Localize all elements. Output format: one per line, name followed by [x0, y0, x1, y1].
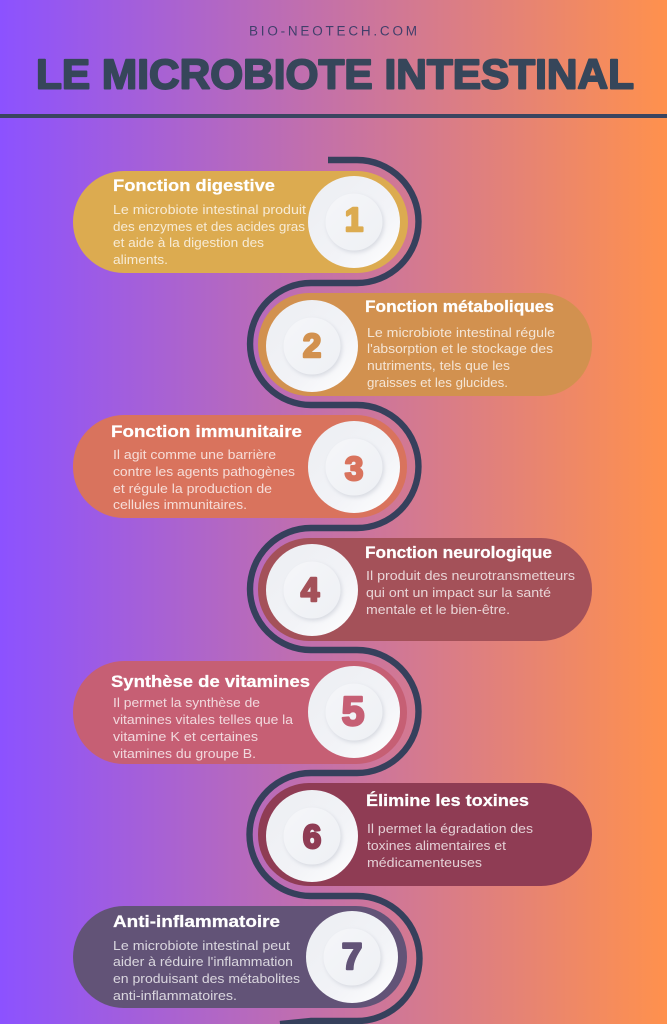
body 2: l'absorption et le stockage des [367, 342, 553, 356]
pill 1 [73, 171, 408, 273]
body 5 [113, 696, 293, 761]
body 2 [367, 326, 555, 390]
step 6 [258, 783, 592, 886]
heading 4: Fonction neurologique [365, 543, 552, 562]
body 7: anti-inflammatoires. [113, 989, 237, 1003]
winding timeline path [250, 160, 420, 1024]
number 7: 7 [342, 936, 362, 977]
disc 2 [266, 300, 358, 392]
body 4: Il produit des neurotransmetteurs [366, 569, 575, 583]
body 3: Il agit comme une barrière [113, 448, 276, 462]
pill 3 [73, 415, 407, 518]
header rule [0, 114, 667, 118]
step 2 [258, 293, 592, 396]
number 3: 3 [345, 450, 363, 487]
number 1: 1 [345, 201, 363, 238]
number 4: 4 [301, 571, 320, 608]
pill 7 [73, 906, 407, 1008]
heading 2: Fonction métaboliques [365, 297, 554, 316]
body 6 [367, 822, 533, 870]
pill 6 [258, 783, 592, 886]
body 7: aider à réduire l'inflammation [113, 955, 293, 969]
body 1: aliments. [113, 253, 168, 267]
body 3: et régule la production de [113, 482, 272, 496]
body 5: vitamines vitales telles que la [113, 713, 293, 727]
body 4: mentale et le bien-être. [366, 603, 510, 617]
number 2: 2 [303, 327, 321, 364]
heading 5: Synthèse de vitamines [111, 672, 310, 691]
heading 3: Fonction immunitaire [111, 422, 302, 441]
body 1: des enzymes et des acides gras [113, 220, 305, 234]
body 6: Il permet la égradation des [367, 822, 533, 836]
body 1: Le microbiote intestinal produit [113, 203, 307, 217]
body 6: médicamenteuses [367, 856, 482, 870]
body 7: Le microbiote intestinal peut [113, 939, 291, 953]
disc 3 [308, 421, 400, 513]
title: LE MICROBIOTE INTESTINAL [36, 50, 634, 98]
disc 4 [266, 544, 358, 636]
body 7: en produisant des métabolites [113, 972, 300, 986]
disc 7 [306, 911, 398, 1003]
step 4 [258, 538, 592, 641]
website label: BIO-NEOTECH.COM [249, 24, 417, 38]
body 6: toxines alimentaires et [367, 839, 507, 853]
body 2: Le microbiote intestinal régule [367, 326, 555, 340]
pill 4 [258, 538, 592, 641]
body 5: vitamines du groupe B. [113, 747, 256, 761]
disc 1 [308, 176, 400, 268]
body 3 [113, 448, 295, 512]
body 2: graisses et les glucides. [367, 376, 508, 390]
step 1 [73, 171, 408, 273]
disc 5 [308, 666, 400, 758]
body 7 [113, 939, 300, 1003]
step 7 [73, 906, 407, 1008]
body 1 [113, 203, 307, 267]
pill 2 [258, 293, 592, 396]
number 6: 6 [303, 818, 321, 855]
heading 6: Élimine les toxines [366, 791, 529, 810]
body 1: et aide à la digestion des [113, 236, 264, 250]
body 5: vitamine K et certaines [113, 730, 258, 744]
body 3: contre les agents pathogènes [113, 465, 295, 479]
step 3 [73, 415, 407, 518]
disc 6 [266, 790, 358, 882]
pill 5 [73, 661, 407, 764]
body 4 [366, 569, 575, 617]
number 5: 5 [342, 688, 364, 734]
body 3: cellules immunitaires. [113, 498, 247, 512]
heading 7: Anti-inflammatoire [113, 912, 280, 931]
body 5: Il permet la synthèse de [113, 696, 260, 710]
body 4: qui ont un impact sur la santé [366, 586, 551, 600]
step 5 [73, 661, 407, 764]
body 2: nutriments, tels que les [367, 359, 510, 373]
heading 1: Fonction digestive [113, 176, 275, 195]
